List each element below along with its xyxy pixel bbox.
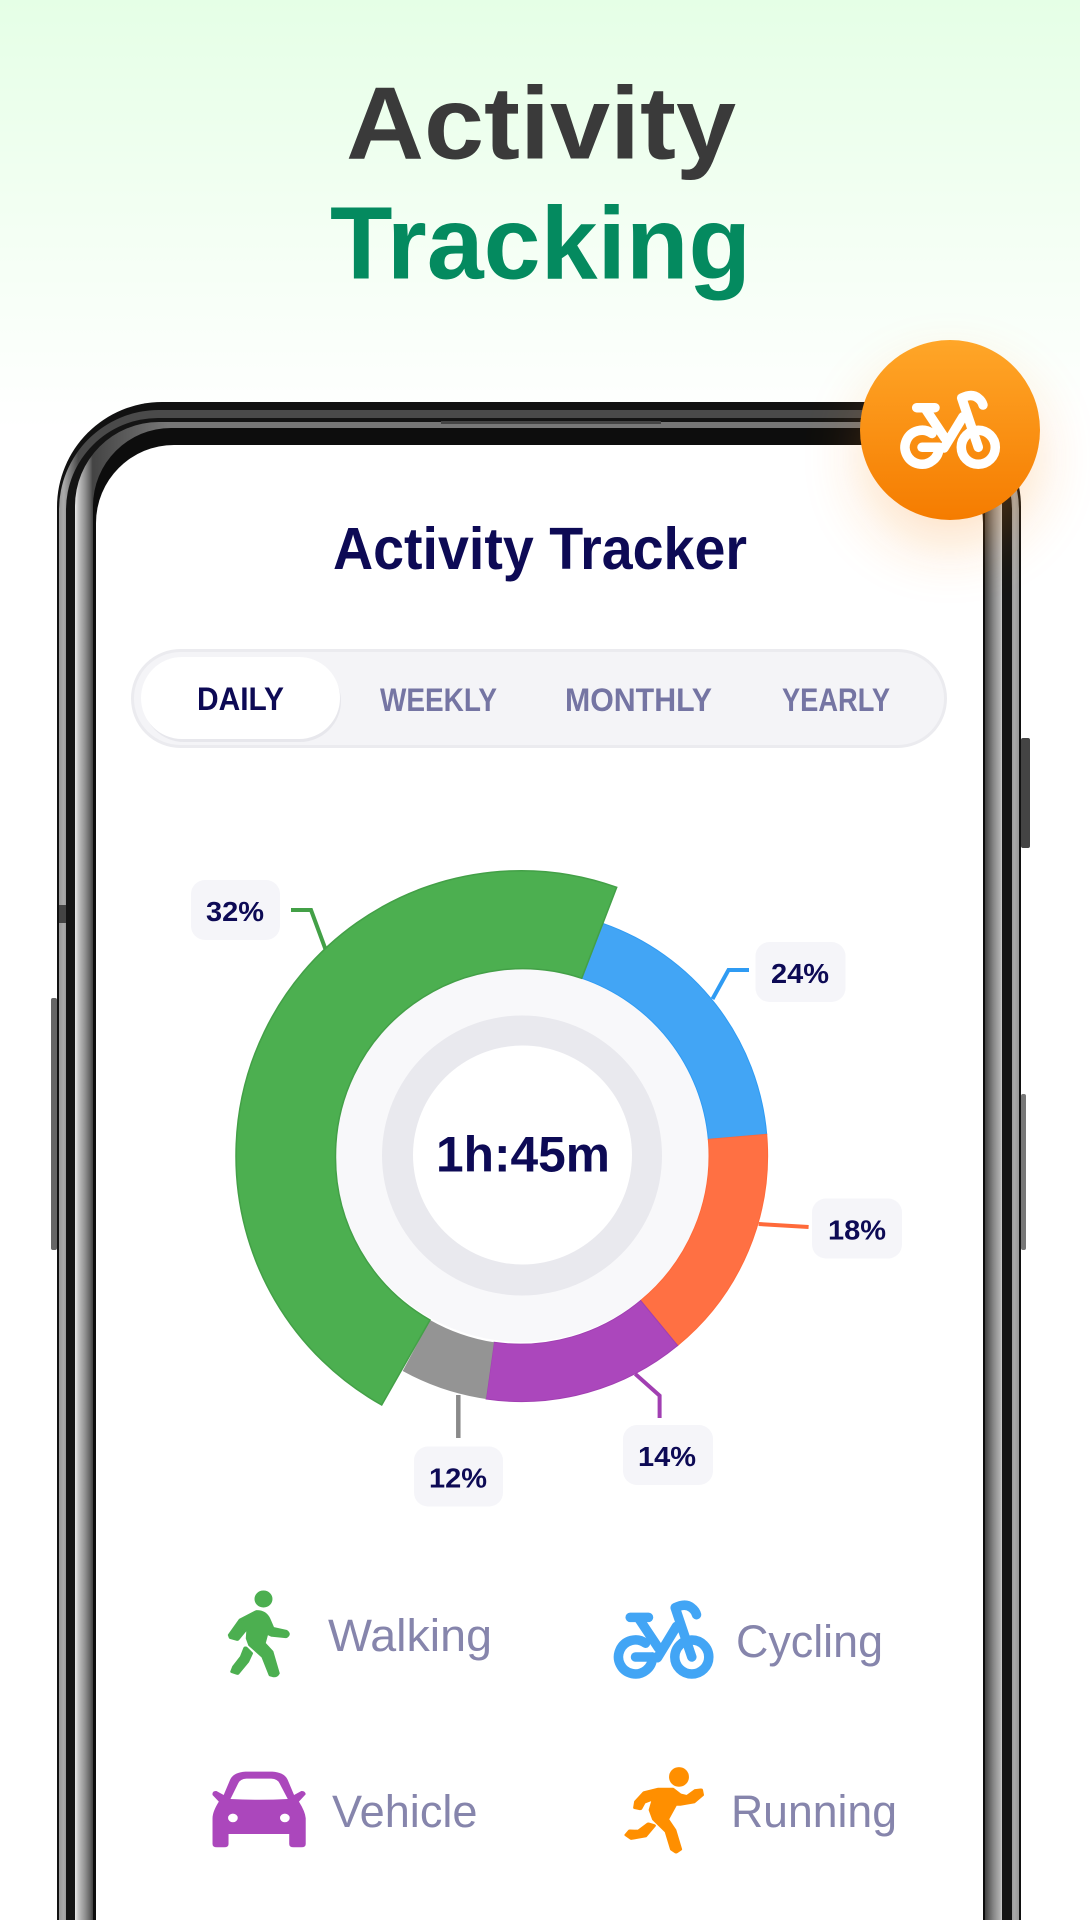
legend: walking: Walking xyxy=(328,1610,492,1661)
callout: 24% xyxy=(712,942,846,1002)
legend: running xyxy=(627,1769,897,1852)
callout: 18%: 18% xyxy=(828,1214,886,1246)
donut chart: 1h:45m xyxy=(436,1126,610,1182)
donut chart xyxy=(236,871,768,1405)
tab bar xyxy=(132,650,946,746)
background gradient xyxy=(0,0,1080,430)
callout: 12% xyxy=(414,1395,503,1506)
tab bar: YEARLY xyxy=(782,682,890,718)
screen heading: Activity Tracker xyxy=(333,516,747,582)
callout: 18% xyxy=(759,1198,902,1258)
title xyxy=(330,66,751,301)
tab bar: WEEKLY xyxy=(380,682,497,718)
title: Tracking xyxy=(330,186,751,301)
legend: walking xyxy=(230,1592,492,1676)
phone frame xyxy=(51,402,1030,1920)
callout: 14%: 14% xyxy=(638,1441,696,1472)
tab bar: DAILY xyxy=(197,681,284,717)
callout: 14% xyxy=(623,1374,713,1485)
legend: running: Running xyxy=(731,1786,897,1837)
callout: 12%: 12% xyxy=(429,1462,487,1494)
legend: vehicle xyxy=(212,1772,478,1847)
tab bar: MONTHLY xyxy=(565,682,712,718)
callout: 32% xyxy=(191,880,325,949)
callout: 32%: 32% xyxy=(206,896,264,927)
icon: orange cycling badge xyxy=(860,340,1040,543)
callout: 24%: 24% xyxy=(771,958,829,989)
legend: vehicle: Vehicle xyxy=(332,1786,478,1837)
legend: cycling: Cycling xyxy=(736,1616,883,1667)
legend: cycling xyxy=(619,1605,883,1674)
title: Activity xyxy=(346,66,736,181)
